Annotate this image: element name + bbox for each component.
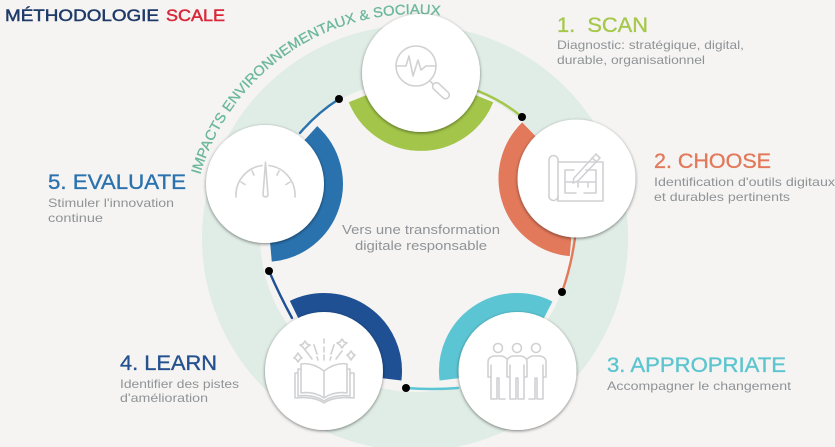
- thin connector arcs: [269, 91, 575, 389]
- step 2: choose: 2. CHOOSE: [654, 150, 771, 173]
- step 4: learn: Identifier des pistes: [120, 377, 239, 391]
- step 2: choose: et durables pertinents: [654, 190, 790, 204]
- icon: gauge: [236, 162, 295, 197]
- pale green outer ring: [202, 25, 628, 447]
- inner light disc: [260, 80, 572, 392]
- step 3: appropriate: Accompagner le changement: [607, 379, 792, 393]
- central caption: [342, 222, 500, 253]
- title: [5, 6, 225, 25]
- title: SCALE: [166, 6, 225, 25]
- icon: blueprint and pencil: [549, 154, 603, 201]
- icon: magnifier with pulse: [396, 46, 451, 100]
- icon: open book with sparkles: [294, 339, 355, 403]
- step 4: learn: [120, 352, 239, 405]
- step 1: scan: 1. SCAN: [557, 14, 648, 37]
- step 2: choose: Identification d'outils digitaux: [654, 175, 835, 189]
- step 1: scan: durable, organisationnel: [557, 53, 705, 67]
- step 1: scan: [557, 14, 744, 67]
- central caption: Vers une transformation: [342, 222, 500, 237]
- step 2: choose: [654, 150, 835, 204]
- icon: three people: [488, 344, 546, 399]
- step 3: appropriate: 3. APPROPRIATE: [607, 354, 786, 377]
- step 1: scan: Diagnostic: stratégique, digital,: [557, 38, 744, 52]
- step 4: learn: d'amélioration: [120, 391, 208, 405]
- step 3: appropriate: [607, 354, 792, 393]
- title: MÉTHODOLOGIE: [5, 6, 159, 25]
- step 5: evaluate: continue: [48, 211, 103, 225]
- step 5: evaluate: [48, 171, 186, 225]
- connector dots: [265, 95, 566, 392]
- thick coloured arcs: [271, 98, 571, 379]
- white circles: [206, 14, 636, 430]
- central caption: digitale responsable: [355, 238, 487, 253]
- curved label: environmental and social impacts: IMPACTS ENVIRONNEMENTAUX & SOCIAUX: [191, 4, 441, 174]
- step 5: evaluate: 5. EVALUATE: [48, 171, 186, 194]
- step 4: learn: 4. LEARN: [120, 352, 217, 375]
- step 5: evaluate: Stimuler l'innovation: [48, 196, 174, 210]
